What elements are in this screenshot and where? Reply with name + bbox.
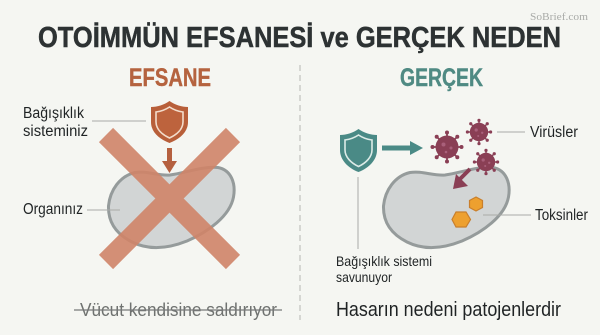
myth caption: Vücut kendisine saldırıyor (80, 300, 277, 320)
icon: myth shield (151, 101, 188, 143)
organ: myth (108, 167, 234, 248)
label: viruses: Virüsler (530, 124, 578, 141)
label line: organ (87, 209, 120, 211)
label line: immune defending (357, 177, 359, 249)
label: toxins: Toksinler (535, 207, 588, 224)
arrow: attack on organ (162, 148, 177, 173)
label: your immune system: Bağışıklık (23, 105, 84, 122)
watermark: SoBrief.com (530, 12, 588, 23)
label line: viruses (497, 131, 525, 133)
label: immune system defending: savunuyor (336, 269, 392, 285)
panel: truth (336, 64, 588, 321)
icon: truth shield (340, 129, 377, 172)
icon: virus large (430, 130, 464, 164)
icon: virus lower (473, 149, 499, 175)
label line: toxins (483, 214, 531, 216)
icon: red X (106, 135, 233, 262)
icon: toxin small (470, 197, 482, 211)
label: your organ: Organınız (23, 201, 83, 218)
label: immune system defending: Bağışıklık sistemi (336, 253, 432, 269)
icon: virus top (466, 119, 492, 145)
panel: myth (23, 64, 282, 320)
label line: immune system (92, 120, 146, 122)
truth heading: GERÇEK (400, 64, 483, 92)
truth caption: Hasarın nedeni patojenlerdir (336, 298, 561, 321)
arrow: virus damage (459, 169, 470, 180)
icon: toxin large (452, 212, 470, 227)
label: your immune system: sisteminiz (23, 123, 88, 140)
organ: truth (383, 167, 509, 248)
arrow: defence (382, 141, 423, 155)
myth heading: EFSANE (129, 64, 211, 92)
